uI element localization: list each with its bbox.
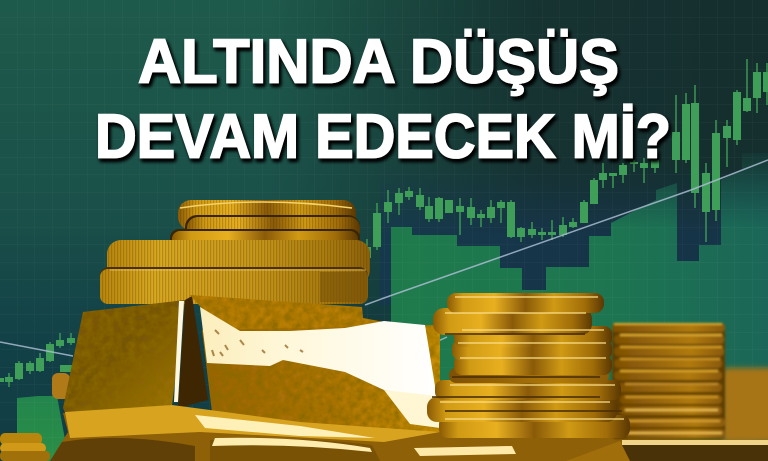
gold: coin behind bar [52, 373, 70, 399]
gold: coin stack right [612, 323, 725, 439]
bar bottom lip [65, 405, 440, 442]
bar bright face [200, 307, 437, 398]
bar top face [190, 295, 384, 332]
chart: green area left [17, 396, 66, 461]
gold: coin stack center [427, 293, 630, 438]
base slab shine [210, 439, 380, 461]
gold: blurred coin stack far right [722, 368, 768, 442]
bar left face [63, 300, 185, 415]
gold: dark slab bottom right [566, 440, 768, 461]
gold: small coins bottom left [0, 433, 50, 461]
bar speckles [212, 330, 303, 356]
gold: bar [50, 295, 768, 461]
title line 2: DEVAM EDECEK Mİ? [95, 102, 671, 172]
chart: trend line [0, 160, 768, 356]
chart: candlesticks left [0, 333, 75, 387]
bar lower gold face [202, 325, 440, 432]
title line 1: ALTINDA DÜŞÜŞ [138, 28, 619, 96]
bar dark crease [178, 296, 208, 408]
title [95, 28, 671, 172]
bar base slab [50, 412, 768, 461]
chart: candlesticks right [363, 59, 768, 260]
bar ridge highlight [174, 301, 184, 402]
chart: green area right [391, 153, 768, 461]
gold: coin stack on bar [100, 200, 370, 304]
